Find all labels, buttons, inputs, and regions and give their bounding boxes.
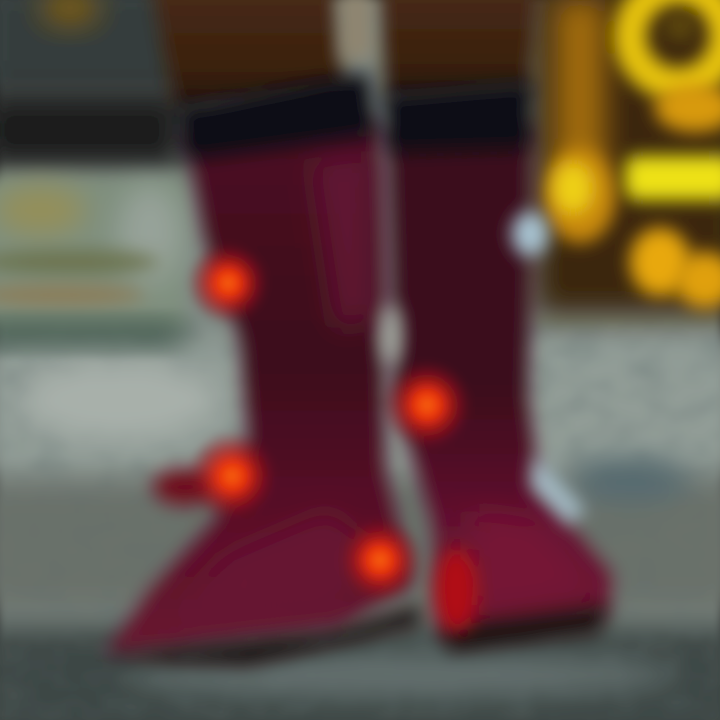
right sock black cuff	[384, 82, 532, 152]
gap between legs	[340, 0, 372, 60]
left leg skin	[150, 0, 345, 110]
pale blue spot on right sock edge	[512, 212, 548, 256]
glowing red spot: left ankle	[153, 430, 278, 522]
glowing red spot: right foot	[434, 548, 478, 632]
right sock	[388, 125, 612, 652]
glowing red spot: right shin	[381, 359, 473, 451]
left sock	[100, 120, 420, 665]
background: dark wall, upper left	[0, 0, 190, 170]
left sock black cuff	[178, 72, 376, 160]
pale highlight near right ankle	[530, 455, 585, 525]
background: pale painted wall, left	[0, 175, 185, 346]
pale highlight between legs	[380, 305, 402, 365]
glowing red spot: upper left shin	[186, 241, 270, 325]
glowing red spot: left foot	[336, 516, 424, 604]
background: amber and yellow neon sign, upper right	[535, 0, 720, 315]
right leg skin	[378, 0, 540, 100]
